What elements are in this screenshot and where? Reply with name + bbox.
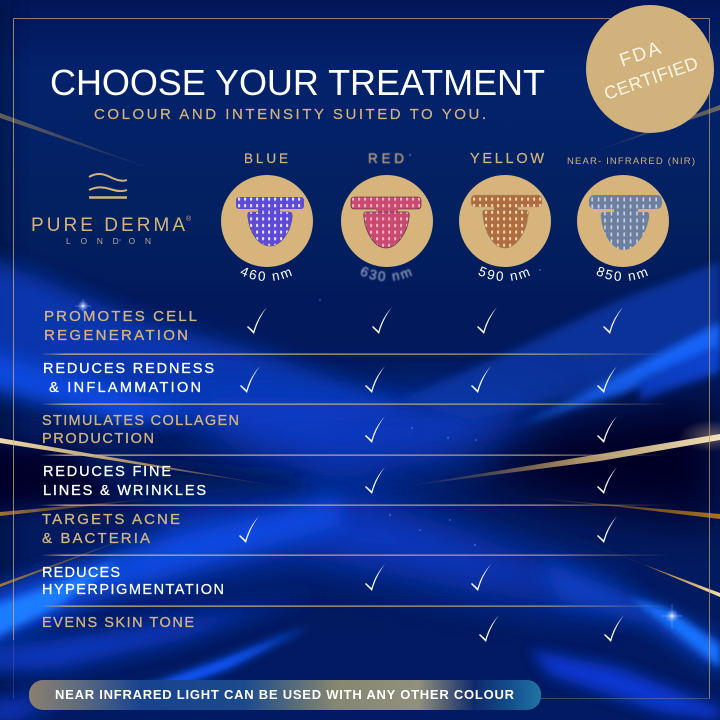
checks: targets acne	[239, 516, 617, 543]
row label: reduces hyperpigmentation: HYPERPIGMENTATION	[42, 582, 224, 598]
row label: reduces fine lines and wrinkles	[43, 464, 206, 499]
logo: Pure Derma London: ®	[186, 215, 192, 223]
checks: reduces redness	[240, 366, 617, 393]
row label: stimulates collagen production	[42, 413, 239, 447]
checks: reduces hyperpigmentation	[365, 564, 491, 591]
row label: promotes cell regeneration: PROMOTES CELL	[44, 308, 197, 325]
wavelength: 460 nm: 460 nm	[240, 268, 292, 281]
checks: stimulates collagen	[365, 416, 617, 443]
wavelength: 850 nm	[596, 266, 648, 281]
row label: targets acne and bacteria: & BACTERIA	[42, 530, 150, 547]
footer note pill	[29, 680, 541, 710]
row label: targets acne and bacteria: TARGETS ACNE	[42, 511, 180, 528]
row label: reduces hyperpigmentation	[42, 565, 224, 598]
row label: reduces redness and inflammation	[43, 361, 214, 396]
checks: evens skin tone	[479, 615, 624, 642]
checks: promotes cell regeneration	[247, 307, 623, 334]
wavelength: 460 nm	[240, 268, 292, 281]
column heading: yellow: YELLOW	[470, 151, 544, 167]
row label: reduces fine lines and wrinkles: LINES & WRINKLES	[43, 483, 206, 499]
lower-left bright band	[0, 498, 340, 650]
FDA certified badge: FDA	[617, 38, 664, 72]
row label: stimulates collagen production: PRODUCTION	[42, 431, 154, 447]
row label: reduces hyperpigmentation: REDUCES	[42, 565, 120, 581]
gold light streaks	[0, 105, 720, 597]
row label: stimulates collagen production: STIMULATES COLLAGEN	[42, 413, 239, 429]
icon: logo waves	[89, 174, 127, 198]
footer note pill: NEAR INFRARED LIGHT CAN BE USED WITH ANY OTHER COLOUR	[55, 687, 515, 702]
lower-right bands	[540, 560, 720, 672]
logo: Pure Derma London	[31, 174, 192, 246]
upper-right bands	[400, 262, 720, 420]
wavelength: 850 nm: 850 nm	[596, 266, 648, 281]
row label: reduces fine lines and wrinkles: REDUCES FINE	[43, 464, 171, 480]
dark pockets	[470, 395, 720, 525]
wavelength: 590 nm: 590 nm	[478, 266, 530, 281]
row label: targets acne and bacteria	[42, 511, 180, 547]
mask: blue	[221, 175, 313, 267]
central lower band	[120, 495, 620, 610]
FDA certified badge: CERTIFIED	[601, 53, 701, 104]
mask: near-infrared	[577, 175, 669, 267]
column heading: red: RED	[368, 151, 404, 166]
wavelength: 590 nm	[478, 266, 530, 281]
mask: red	[341, 175, 433, 267]
row label: reduces redness and inflammation: & INFLAMMATION	[49, 380, 201, 396]
column heading: near-infrared: NEAR- INFRARED (NIR)	[567, 156, 695, 167]
logo wordmark: PURE DERMA	[31, 215, 185, 236]
FDA certified badge	[586, 5, 714, 133]
checks: reduces fine lines	[365, 467, 617, 494]
wavelength: 630 nm: 630 nm	[360, 266, 413, 282]
row label: reduces redness and inflammation: REDUCES REDNESS	[43, 361, 214, 377]
mask: yellow	[459, 175, 551, 267]
logo tagline: LONDON	[66, 236, 151, 246]
upper-left band	[0, 262, 420, 432]
subtitle: COLOUR AND INTENSITY SUITED TO YOU.	[94, 106, 486, 123]
star sparkles	[75, 154, 682, 628]
lower-left second band	[0, 590, 320, 672]
row label: promotes cell regeneration: REGENERATION	[44, 327, 188, 344]
check marks	[239, 307, 624, 642]
row label: promotes cell regeneration	[44, 308, 197, 344]
row label: evens skin tone: EVENS SKIN TONE	[42, 615, 194, 631]
column heading: blue: BLUE	[244, 151, 288, 166]
title: CHOOSE YOUR TREATMENT	[50, 62, 545, 103]
